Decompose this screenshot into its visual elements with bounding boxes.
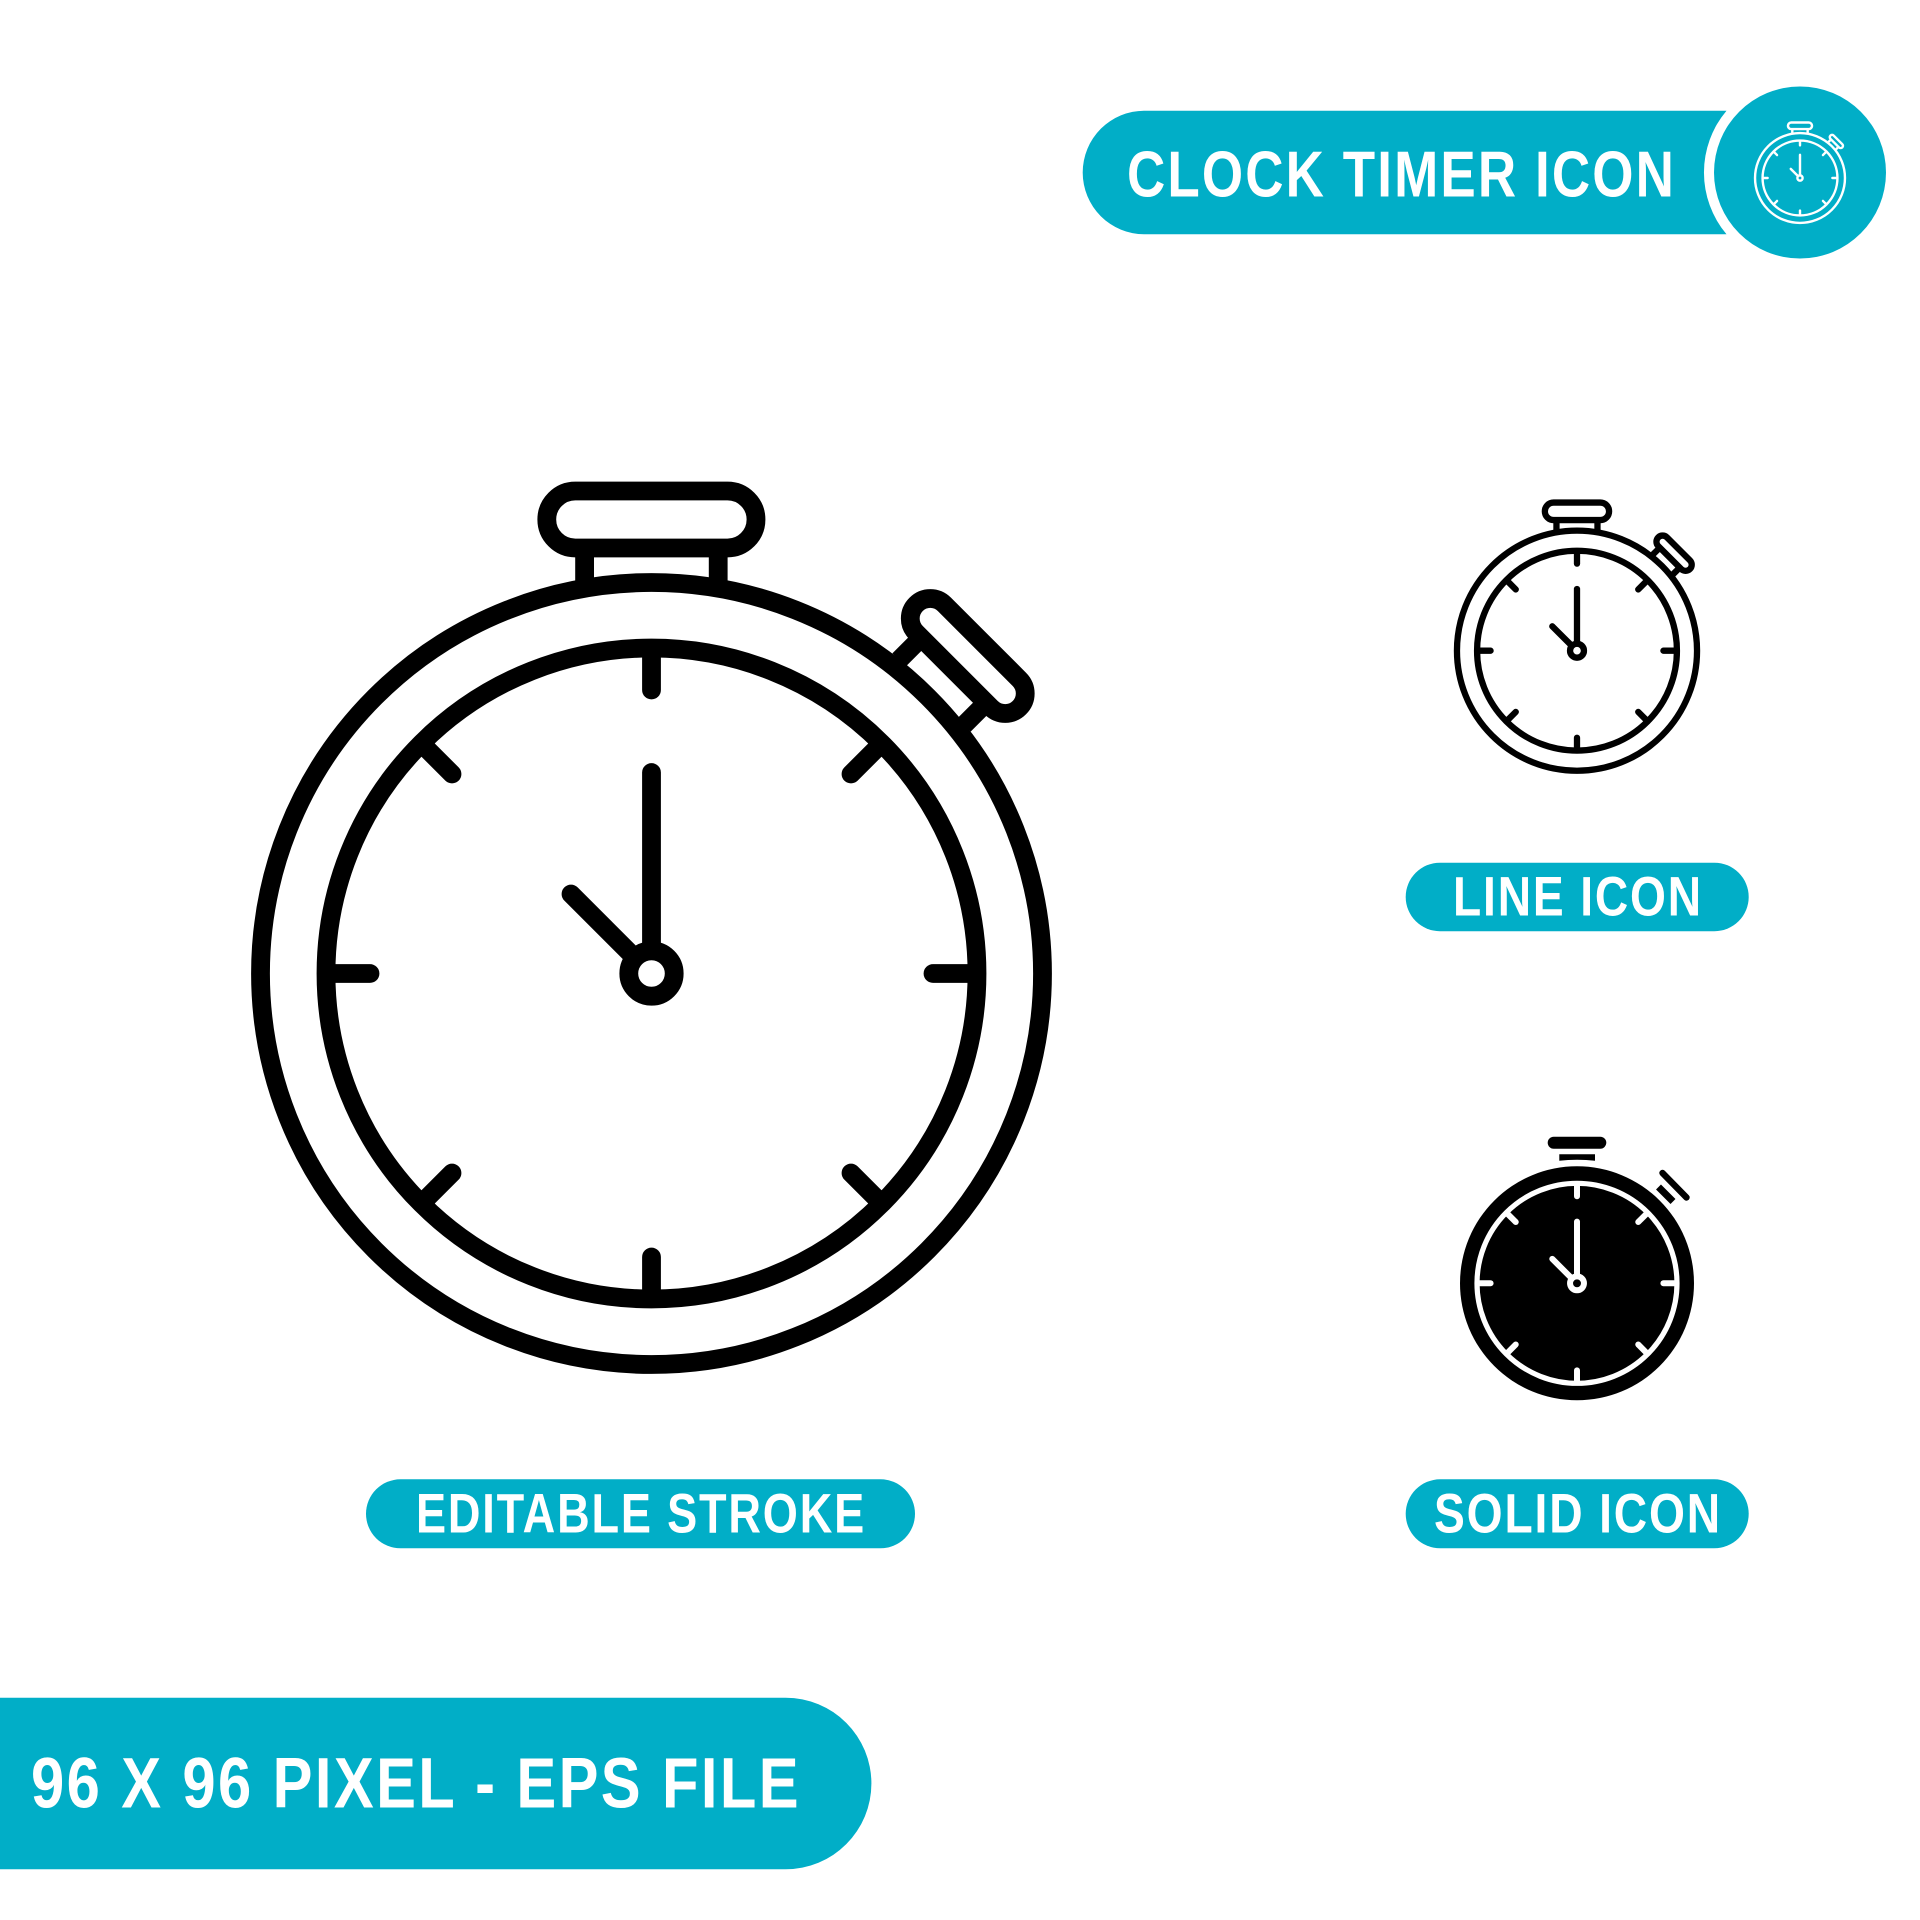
top button bar (1548, 1137, 1606, 1149)
white dial ring (1477, 1183, 1677, 1383)
label pill: editable stroke: EDITABLE STROKE (416, 1482, 866, 1544)
icon: line stopwatch (1457, 503, 1697, 771)
solid dial disc (1460, 1166, 1694, 1400)
icon: solid stopwatch (1460, 1137, 1694, 1400)
icon: large editable stroke stopwatch (260, 491, 1042, 1364)
footer banner: file format (0, 1698, 871, 1869)
side button bar (1662, 1173, 1686, 1198)
header banner: clock timer icon (1083, 86, 1886, 258)
label pill: line icon: LINE ICON (1453, 865, 1703, 927)
header pill (1083, 111, 1726, 234)
footer banner: file format: 96 X 96 PIXEL - EPS FILE (31, 1744, 801, 1824)
label pill: solid icon: SOLID ICON (1434, 1482, 1722, 1544)
header badge circle (1714, 86, 1886, 258)
top button stem (1559, 1154, 1595, 1161)
heading text: CLOCK TIMER ICON (1127, 138, 1676, 210)
side button stem (1658, 1187, 1673, 1202)
white ticks and hands (1480, 1186, 1674, 1381)
icon: small white stopwatch (1755, 123, 1845, 223)
